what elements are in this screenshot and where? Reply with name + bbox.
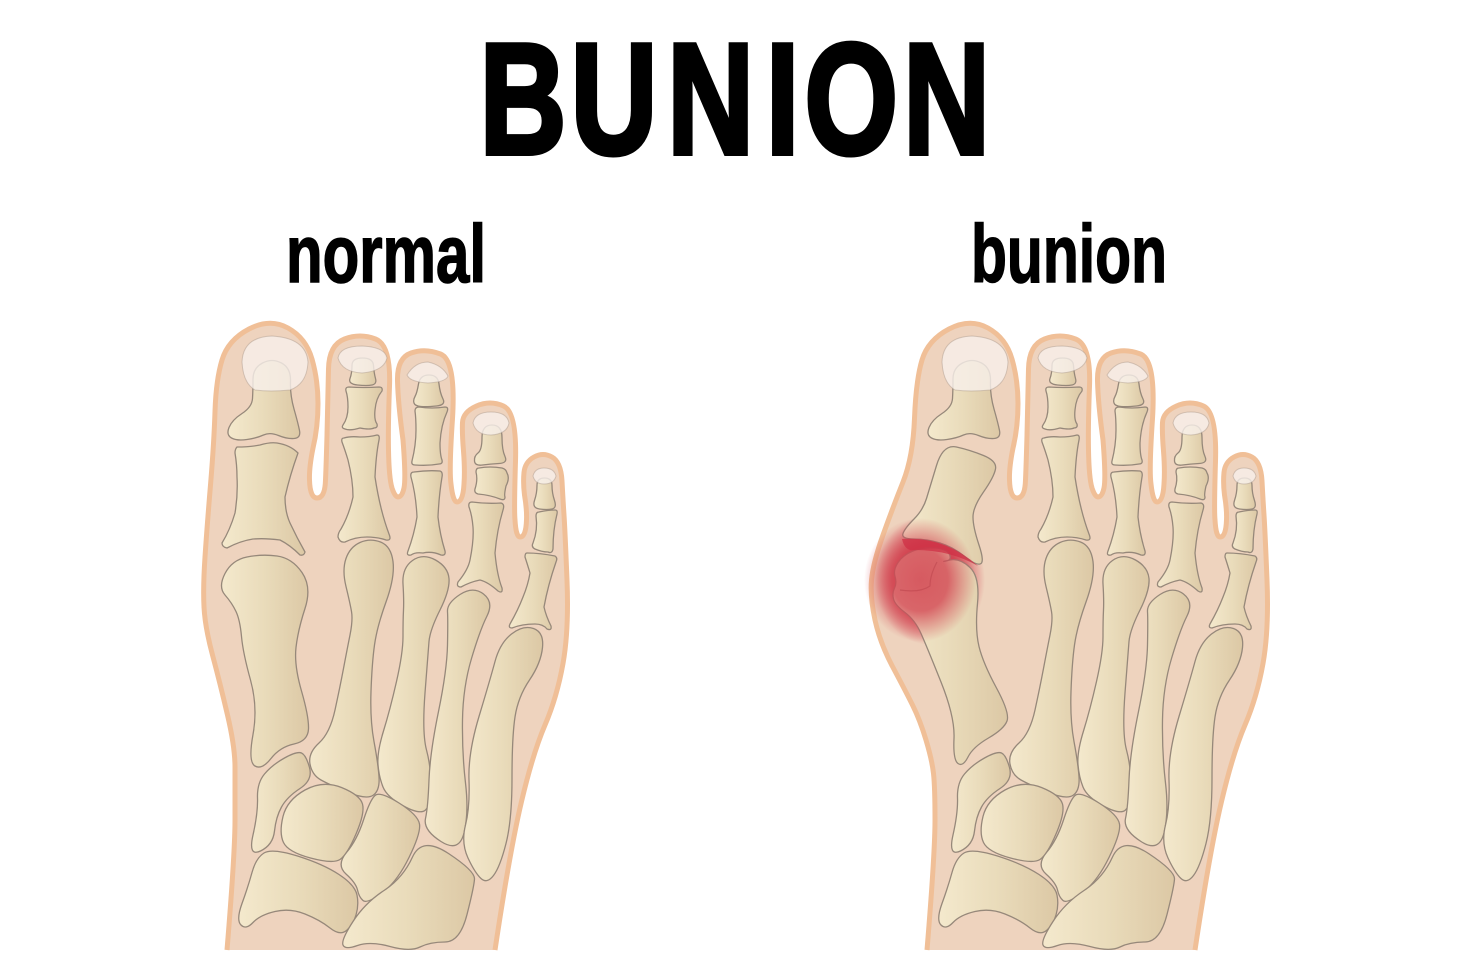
- fourth toe: [425, 412, 509, 846]
- second toe: [310, 346, 393, 797]
- heading: normal: normal: [286, 209, 486, 300]
- normal foot skin outline: [204, 323, 567, 950]
- inflammation glow under bones: [875, 515, 985, 645]
- normal foot: big toe proximal phalanx: [222, 443, 305, 555]
- panel: bunion foot: [864, 323, 1268, 950]
- title: BUNION: [480, 11, 990, 187]
- heading: bunion: bunion: [971, 209, 1167, 300]
- tarsal bones: [239, 753, 475, 949]
- inflammation glow over bones: [864, 518, 978, 642]
- normal foot: big toe tip and nail: [228, 336, 308, 440]
- bunion foot: big toe tip and nail: [928, 336, 1008, 440]
- panel: normal foot: [204, 323, 567, 950]
- normal foot: first metatarsal: [222, 555, 309, 767]
- fifth toe: [464, 468, 557, 881]
- bunion foot: displaced proximal phalanx: [903, 447, 996, 564]
- metatarsal head lobe line: [900, 562, 937, 591]
- bunion foot: lesser toes and tarsal bones: [939, 346, 1257, 949]
- bunion foot: first metatarsal with enlarged head: [893, 548, 1008, 764]
- third toe: [378, 362, 449, 812]
- normal foot: lesser toes and tarsal bones: [239, 346, 557, 949]
- bunion foot skin outline: [871, 323, 1268, 950]
